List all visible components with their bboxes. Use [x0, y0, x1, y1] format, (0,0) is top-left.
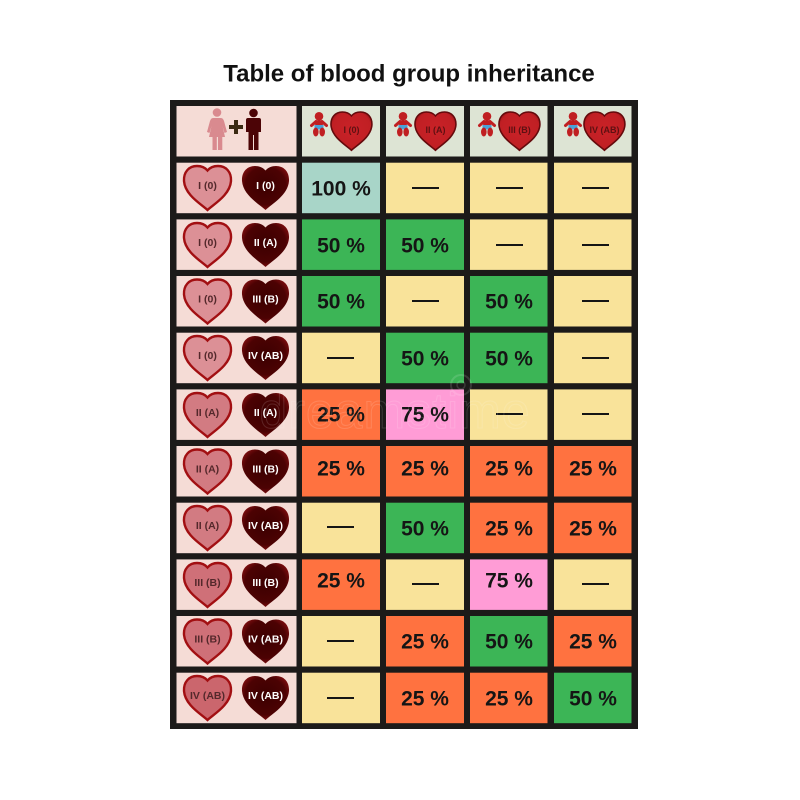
row: I (0) + I (0): 100 % — [311, 178, 371, 200]
row: II (A) + III (B): 25 % — [401, 458, 449, 480]
row: II (A) + III (B): III (B) — [252, 464, 279, 476]
row: IV (AB) + IV (AB): IV (AB) — [190, 690, 225, 702]
row: II (A) + II (A) — [176, 389, 632, 440]
row: III (B) + IV (AB): 25 % — [401, 630, 449, 654]
row: IV (AB) + IV (AB): IV (AB) — [248, 690, 283, 702]
watermark: dreamstime — [259, 383, 531, 439]
row: IV (AB) + IV (AB) — [176, 673, 632, 723]
row: I (0) + II (A) — [176, 219, 632, 270]
row: II (A) + IV (AB) — [176, 503, 632, 553]
row: IV (AB) + IV (AB): 25 % — [485, 688, 533, 710]
header cell: child II (A): II (A) — [426, 125, 446, 135]
row: I (0) + III (B): 50 % — [317, 290, 365, 314]
row: I (0) + IV (AB): I (0) — [198, 350, 217, 362]
row: II (A) + IV (AB): II (A) — [196, 520, 219, 532]
row: I (0) + IV (AB): 50 % — [485, 348, 533, 370]
row: II (A) + III (B): 25 % — [317, 458, 365, 480]
row: I (0) + III (B): 50 % — [485, 290, 533, 314]
header cell: child IV (AB): IV (AB) — [590, 125, 620, 135]
row: II (A) + III (B) — [176, 446, 632, 496]
row: II (A) + III (B): II (A) — [196, 464, 219, 476]
row: I (0) + III (B) — [176, 276, 632, 326]
header cell: child I (0): I (0) — [343, 125, 360, 135]
header cell: child III (B): III (B) — [508, 125, 531, 135]
row: I (0) + I (0): I (0) — [256, 180, 275, 192]
row: II (A) + II (A): 25 % — [317, 404, 365, 426]
header cell: parents icon — [176, 106, 296, 156]
row: III (B) + III (B): III (B) — [194, 577, 221, 589]
row: III (B) + III (B): III (B) — [252, 577, 279, 589]
table frame — [170, 100, 638, 729]
row: II (A) + IV (AB): 25 % — [569, 518, 617, 540]
row: III (B) + IV (AB) — [176, 616, 632, 666]
row: II (A) + II (A): 75 % — [401, 404, 449, 426]
row: III (B) + IV (AB): IV (AB) — [248, 634, 283, 646]
row: III (B) + III (B) — [176, 559, 632, 610]
header cell: child I (0) — [302, 106, 380, 156]
row: III (B) + IV (AB): III (B) — [194, 634, 221, 646]
row: II (A) + IV (AB): 25 % — [485, 518, 533, 540]
row: IV (AB) + IV (AB): 50 % — [569, 688, 617, 710]
row: III (B) + III (B): 75 % — [485, 570, 533, 592]
row: I (0) + I (0) — [176, 163, 632, 213]
row: II (A) + III (B): 25 % — [569, 458, 617, 480]
row: II (A) + III (B): 25 % — [485, 458, 533, 480]
row: I (0) + II (A): 50 % — [401, 234, 449, 258]
row: II (A) + II (A): II (A) — [196, 407, 219, 419]
row: I (0) + II (A): I (0) — [198, 237, 217, 249]
row: I (0) + II (A): 50 % — [317, 234, 365, 258]
row: I (0) + IV (AB): 50 % — [401, 348, 449, 370]
row: IV (AB) + IV (AB): 25 % — [401, 688, 449, 710]
header cell: child II (A) — [386, 106, 464, 156]
row: II (A) + IV (AB): IV (AB) — [248, 520, 283, 532]
row: II (A) + II (A): II (A) — [254, 407, 277, 419]
row: I (0) + I (0): I (0) — [198, 180, 217, 192]
row: III (B) + III (B): 25 % — [317, 570, 365, 592]
row: I (0) + IV (AB): IV (AB) — [248, 350, 283, 362]
row: I (0) + III (B): III (B) — [252, 294, 279, 306]
title: Table of blood group inheritance — [223, 60, 595, 88]
row: III (B) + IV (AB): 50 % — [485, 630, 533, 654]
header cell: child IV (AB) — [554, 106, 632, 156]
row: III (B) + IV (AB): 25 % — [569, 630, 617, 654]
header cell: child III (B) — [470, 106, 548, 156]
row: II (A) + IV (AB): 50 % — [401, 518, 449, 540]
header row — [176, 106, 632, 156]
row: I (0) + III (B): I (0) — [198, 294, 217, 306]
row: I (0) + II (A): II (A) — [254, 237, 277, 249]
row: I (0) + IV (AB) — [176, 333, 632, 383]
